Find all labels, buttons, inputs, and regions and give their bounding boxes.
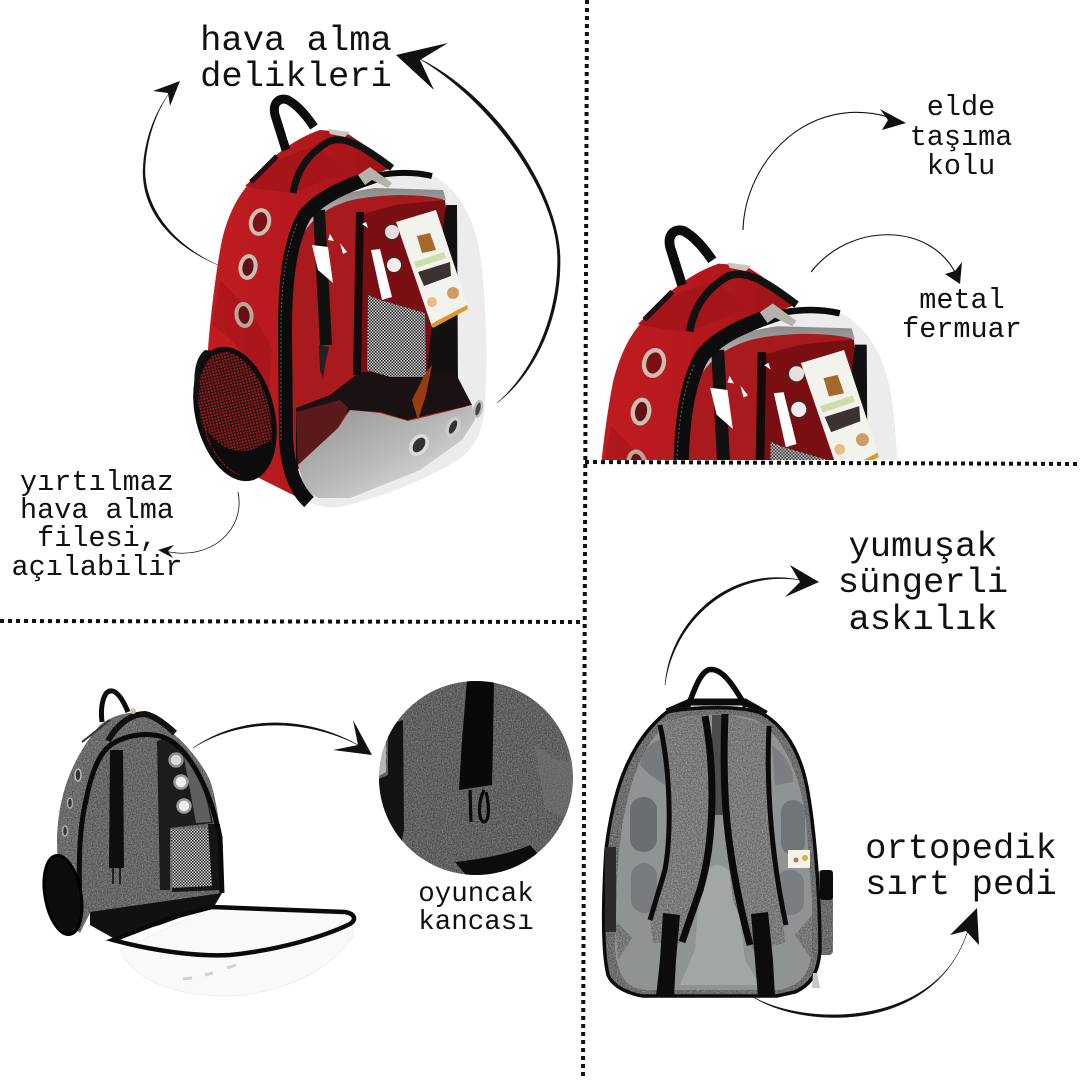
arrow: to metal fermuar bbox=[811, 235, 962, 284]
arrow: to ortopedik sırt pedi bbox=[750, 908, 979, 1018]
panel: red backpack close-up bbox=[602, 225, 898, 460]
side straps bbox=[82, 720, 110, 742]
label: elde taşıma kolu: kolu bbox=[927, 150, 995, 183]
label: oyuncak kancası: oyuncak bbox=[418, 879, 534, 910]
lid rim bbox=[113, 907, 354, 955]
panel: red backpack with ventilation bbox=[183, 99, 486, 508]
zipper pull bbox=[812, 973, 820, 988]
eyelets bbox=[170, 754, 182, 766]
label: yumuşak süngerli askılık: askılık bbox=[848, 599, 998, 640]
wedges bbox=[615, 920, 632, 960]
label: metal fermuar: metal bbox=[919, 284, 1005, 317]
brand label bbox=[788, 850, 810, 868]
back handle bbox=[101, 691, 128, 722]
label: yırtılmaz hava alma filesi: filesi, bbox=[37, 522, 157, 555]
label: yırtılmaz hava alma filesi: hava alma bbox=[20, 494, 174, 527]
top handle bbox=[687, 670, 746, 708]
lighter fold bbox=[536, 746, 573, 816]
shell bbox=[604, 706, 820, 996]
label: ortopedik sırt pedi: sırt pedi bbox=[865, 864, 1057, 905]
product: cropped red backpack bbox=[602, 225, 898, 460]
mesh window bbox=[171, 828, 212, 888]
side pouch bbox=[818, 870, 833, 955]
label: ortopedik sırt pedi: ortopedik bbox=[865, 828, 1057, 869]
arrow: to elde taşıma kolu bbox=[743, 109, 906, 230]
arrow: small, to hava alma delikleri bbox=[143, 81, 218, 265]
hook bbox=[470, 790, 488, 822]
left shoulder strap bbox=[650, 715, 713, 943]
side mesh bbox=[605, 847, 616, 932]
heading: hava alma delikleri: delikleri bbox=[200, 56, 392, 97]
inner fabric bbox=[79, 735, 222, 913]
product: red backpack bbox=[183, 99, 486, 508]
round pocket bbox=[38, 852, 88, 938]
outer eyelets bbox=[75, 769, 81, 781]
label: elde taşıma kolu: elde bbox=[927, 91, 995, 124]
opening rim bbox=[79, 735, 222, 905]
bottom dark floor bbox=[90, 893, 222, 938]
fabric circle bbox=[379, 681, 573, 875]
shell rim bbox=[604, 708, 820, 996]
label: yumuşak süngerli askılık: süngerli bbox=[838, 562, 1008, 603]
interior strap bbox=[109, 750, 124, 868]
bottom shadow bbox=[455, 845, 538, 875]
label: yumuşak süngerli askılık: yumuşak bbox=[848, 526, 998, 567]
arrow: to yırtılmaz file bbox=[158, 492, 239, 558]
bumps bbox=[630, 797, 657, 852]
panel: grey backpack back view bbox=[604, 670, 833, 997]
arrow: large, to hava alma delikleri bbox=[396, 43, 560, 403]
label: elde taşıma kolu: taşıma bbox=[910, 121, 1012, 154]
clear lid bbox=[120, 908, 354, 996]
grey shell bbox=[57, 713, 222, 933]
arrow: to oyuncak kancası bbox=[193, 720, 372, 755]
fabric strap bbox=[459, 680, 494, 790]
dark eyelet column bbox=[157, 738, 213, 890]
label: metal fermuar: fermuar bbox=[902, 313, 1022, 346]
inner shell bbox=[615, 714, 812, 990]
arrow: to yumuşak süngerli askılık bbox=[665, 565, 819, 685]
right shoulder strap bbox=[722, 713, 785, 950]
panel: toy hook close-up bbox=[376, 680, 575, 880]
label: yırtılmaz hava alma filesi: yırtılmaz bbox=[20, 466, 174, 499]
heading: hava alma delikleri: hava alma bbox=[200, 20, 392, 61]
buckles bbox=[656, 913, 680, 997]
left zipper edge bbox=[379, 720, 404, 840]
panel: open grey backpack bbox=[38, 691, 354, 996]
label: oyuncak kancası: kancası bbox=[418, 907, 534, 938]
label: yırtılmaz hava alma filesi: açılabilir bbox=[11, 551, 183, 584]
